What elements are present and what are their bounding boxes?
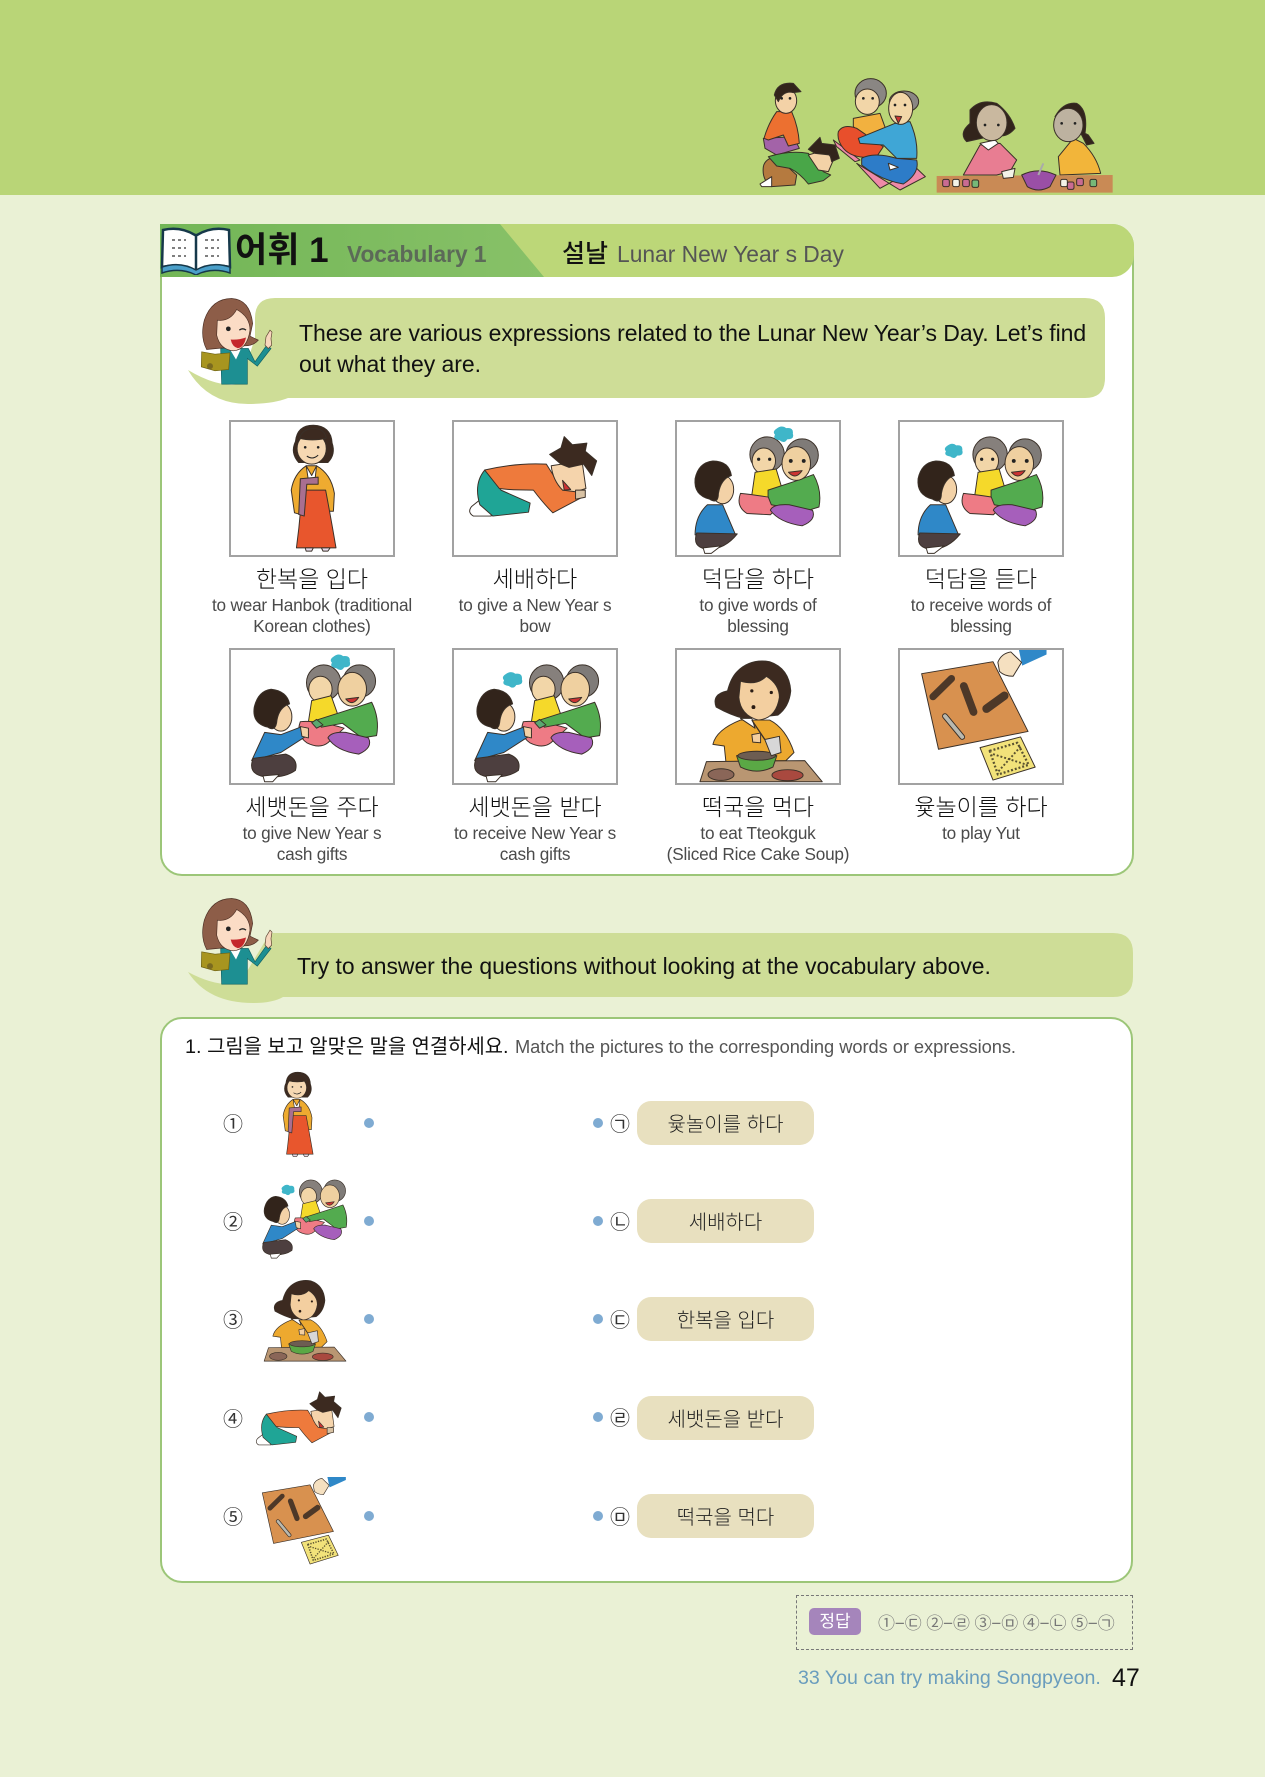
english meaning: cash gifts: [500, 844, 570, 864]
row 5: picture yut: [223, 1477, 374, 1564]
heading: vocabulary 1: 어휘 1: [235, 231, 329, 270]
top banner: [0, 0, 1265, 195]
answer option b: [593, 1199, 814, 1243]
picture: eating tteokguk: [675, 648, 841, 785]
english meaning: bow: [520, 616, 550, 636]
heading: lunar new year's day: 설날 Lunar New Year s Day: [562, 240, 844, 268]
illustration: family bowing and making songpyeon: [760, 78, 1113, 193]
icon: teacher with book: [201, 898, 272, 984]
korean word: 덕담을 듣다: [925, 566, 1037, 592]
english meaning: to give New Year s: [243, 823, 381, 843]
vocabulary item: eat tteokguk: [667, 648, 849, 864]
picture: yut game: [898, 648, 1064, 785]
thumbnail: [282, 1072, 314, 1157]
number 5: ⑤: [223, 1507, 243, 1529]
icon: open book: [160, 228, 232, 275]
korean word: 윷놀이를 하다: [914, 794, 1048, 820]
thumbnail: [256, 1391, 342, 1446]
word pill: [637, 1396, 814, 1440]
answer badge: [809, 1608, 861, 1635]
row 4: picture bow: [223, 1391, 374, 1446]
answer badge: 정답: [819, 1612, 851, 1631]
letter: ㉣: [610, 1408, 630, 1430]
callout: intro speech bubble: [188, 298, 1105, 404]
footer caption: 33 You can try making Songpyeon.: [798, 1667, 1101, 1689]
korean word: 세배하다: [493, 566, 577, 592]
answer option e: [593, 1494, 814, 1538]
dot: [593, 1216, 603, 1226]
word pill: 세배하다: [689, 1212, 762, 1234]
section header bar: [160, 224, 1134, 277]
row 1: picture hanbok: [223, 1072, 374, 1157]
number 1: ①: [223, 1114, 243, 1136]
connector dot: [364, 1511, 374, 1521]
picture: receiving cash gift: [452, 648, 618, 785]
word pill: [637, 1297, 814, 1341]
instruction text: Try to answer the questions without looking at the vocabulary above.: [297, 953, 991, 979]
picture: receiving words of blessing: [898, 420, 1064, 557]
row 3: picture tteokguk: [223, 1280, 374, 1362]
vocabulary item: wear hanbok: [212, 420, 412, 636]
english meaning: [212, 595, 412, 636]
connector dot: [364, 1118, 374, 1128]
dot: [593, 1314, 603, 1324]
row 2: picture cash gift: [223, 1180, 374, 1258]
number 3: ③: [223, 1310, 243, 1332]
word pill: 윷놀이를 하다: [668, 1114, 783, 1136]
korean word: 한복을 입다: [256, 566, 368, 592]
number 4: ④: [223, 1409, 243, 1431]
english meaning: [911, 595, 1052, 636]
answer option a: [593, 1101, 814, 1145]
word pill: [637, 1494, 814, 1538]
number 2: ②: [223, 1212, 243, 1234]
korean word: 세뱃돈을 주다: [245, 794, 379, 820]
english meaning: to give words of: [699, 595, 817, 615]
picture: giving words of blessing: [675, 420, 841, 557]
callout: try to answer bubble: [188, 933, 1133, 1003]
english meaning: to receive words of: [911, 595, 1051, 615]
connector dot: [364, 1216, 374, 1226]
dot: [593, 1412, 603, 1422]
english meaning: [458, 595, 611, 636]
english meaning: [667, 823, 849, 864]
english meaning: to eat Tteokguk: [700, 823, 816, 843]
thumbnail: [264, 1280, 346, 1362]
answers: ①−㉢ ②−㉣ ③−㉤ ④−㉡ ⑤−㉠: [878, 1614, 1115, 1633]
picture: giving cash gift: [229, 648, 395, 785]
letter: ㉡: [610, 1212, 630, 1234]
vocabulary item: play yut: [898, 648, 1064, 843]
darker green tab: [160, 224, 544, 277]
thumbnail: [262, 1180, 348, 1258]
intro text: out what they are.: [299, 351, 481, 377]
english meaning: to wear Hanbok (traditional: [212, 595, 412, 615]
vocabulary item: give blessing: [675, 420, 841, 636]
english meaning: [242, 823, 381, 864]
connector dot: [364, 1412, 374, 1422]
english meaning: [454, 823, 616, 864]
intro text: These are various expressions related to the Lunar New Year’s Day. Let’s find: [299, 320, 1086, 346]
english meaning: to play Yut: [942, 823, 1020, 843]
korean word: 떡국을 먹다: [702, 794, 814, 820]
page number: 47: [1112, 1664, 1140, 1692]
heading: vocabulary 1 english: Vocabulary 1: [347, 241, 487, 267]
thumbnail: [262, 1477, 346, 1564]
icon: teacher with book: [201, 298, 272, 384]
picture: hanbok: [229, 420, 395, 557]
english meaning: blessing: [727, 616, 789, 636]
picture: bowing: [452, 420, 618, 557]
answer key box: [796, 1595, 1133, 1650]
korean word: 세뱃돈을 받다: [468, 794, 602, 820]
english meaning: blessing: [950, 616, 1012, 636]
korean word: 덕담을 하다: [702, 566, 814, 592]
english meaning: cash gifts: [277, 844, 347, 864]
intro text: [299, 320, 1086, 377]
panel: matching exercise: [160, 1017, 1133, 1583]
vocabulary item: give cash gifts: [229, 648, 395, 864]
word pill: 세뱃돈을 받다: [668, 1409, 783, 1431]
letter: ㉢: [610, 1310, 630, 1332]
word pill: 떡국을 먹다: [677, 1507, 774, 1529]
word pill: [637, 1199, 814, 1243]
english meaning: to receive New Year s: [454, 823, 616, 843]
connector dot: [364, 1314, 374, 1324]
letter: ㉠: [610, 1114, 630, 1136]
english meaning: (Sliced Rice Cake Soup): [667, 844, 849, 864]
dot: [593, 1511, 603, 1521]
vocabulary item: receive cash gifts: [452, 648, 618, 864]
answer option d: [593, 1396, 814, 1440]
word pill: 한복을 입다: [677, 1310, 774, 1332]
dot: [593, 1118, 603, 1128]
word pill: [637, 1101, 814, 1145]
exercise instruction: 1. 그림을 보고 알맞은 말을 연결하세요. Match the pictures to the corresponding words or expressions.: [185, 1036, 1016, 1058]
vocabulary item: receive blessing: [898, 420, 1064, 636]
english meaning: to give a New Year s: [459, 595, 611, 615]
panel: vocabulary 1: [160, 224, 1134, 876]
letter: ㉤: [610, 1507, 630, 1529]
vocabulary item: new year's bow: [452, 420, 618, 636]
english meaning: [699, 595, 817, 636]
answer option c: [593, 1297, 814, 1341]
english meaning: Korean clothes): [253, 616, 371, 636]
